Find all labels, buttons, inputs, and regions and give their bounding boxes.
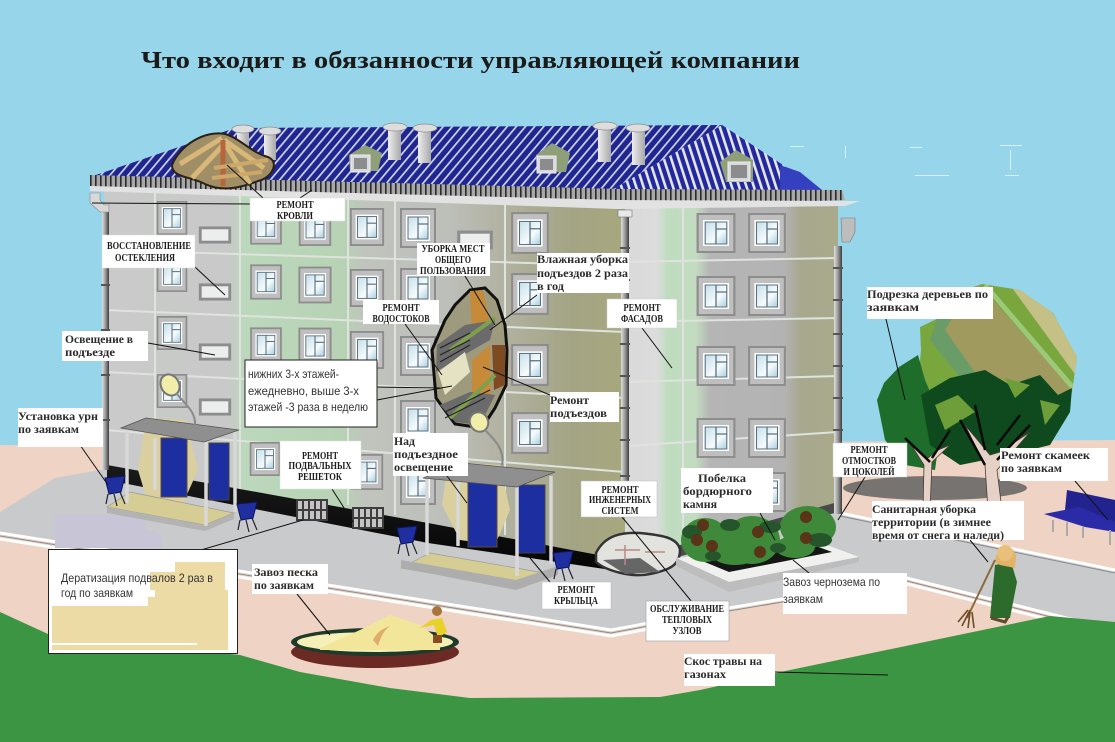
stairwell cutaway bbox=[432, 288, 507, 428]
sky specks bbox=[790, 145, 1022, 176]
label: дератизация: Дератизация подвалов 2 раз в bbox=[61, 571, 213, 585]
label: завоз чернозема bbox=[783, 573, 907, 614]
label: уборка мест общего пользования bbox=[417, 243, 490, 277]
label: восстановление остекления: ОСТЕКЛЕНИЯ bbox=[115, 253, 175, 264]
label: ремонт водостоков: РЕМОНТ bbox=[382, 303, 420, 314]
roof blue corner bbox=[780, 165, 822, 190]
park bench bbox=[1044, 490, 1115, 545]
label: ремонт инженерных систем: РЕМОНТ bbox=[602, 485, 638, 496]
label: ремонт отмостков и цоколей bbox=[833, 443, 907, 478]
roof hip bbox=[612, 125, 820, 190]
label: подрезка деревьев: Подрезка деревьев по bbox=[867, 287, 988, 301]
label: побелка бордюрного камня bbox=[681, 468, 773, 513]
label: уборка подъездов bbox=[245, 360, 377, 427]
trees bbox=[877, 284, 1077, 501]
label: ремонт кровли bbox=[250, 198, 345, 222]
label: ремонт отмостков и цоколей: ОТМОСТКОВ bbox=[842, 456, 896, 467]
lawn bbox=[0, 612, 1115, 742]
label: санитарная уборка: территории (в зимнее bbox=[872, 515, 992, 529]
label: уборка мест общего пользования: ПОЛЬЗОВАНИЯ bbox=[420, 266, 486, 277]
building bbox=[104, 190, 838, 572]
label: обслуживание тепловых узлов: УЗЛОВ bbox=[672, 626, 702, 637]
label: ремонт подъездов bbox=[550, 392, 619, 422]
label: обслуживание тепловых узлов: ТЕПЛОВЫХ bbox=[662, 615, 712, 626]
label: ремонт фасадов bbox=[607, 299, 677, 328]
label: ремонт подъездов: Ремонт bbox=[550, 393, 589, 407]
label: установка урн bbox=[18, 408, 103, 447]
ground bbox=[0, 440, 1115, 742]
benches at entrances bbox=[105, 476, 573, 581]
label: дератизация bbox=[48, 550, 238, 654]
label: влажная уборка: Влажная уборка bbox=[537, 252, 628, 266]
leader lines bbox=[80, 165, 1108, 675]
label: обслуживание тепловых узлов bbox=[646, 601, 729, 641]
title: Что входит в обязанности управляющей компании bbox=[141, 48, 800, 74]
label: ремонт скамеек: Ремонт скамеек bbox=[1001, 448, 1090, 462]
label: влажная уборка: в год bbox=[537, 279, 564, 293]
label: санитарная уборка bbox=[872, 501, 1024, 542]
eave board bbox=[90, 186, 860, 209]
tree crown left bbox=[877, 355, 942, 470]
label: дератизация: год по заявкам bbox=[61, 586, 133, 600]
child figure bbox=[420, 606, 447, 643]
windows, left facade bbox=[157, 201, 549, 505]
label: завоз песка bbox=[252, 564, 328, 594]
label: ремонт кровли: РЕМОНТ bbox=[276, 200, 314, 211]
lamp left bbox=[157, 371, 195, 425]
label: ремонт водостоков: ВОДОСТОКОВ bbox=[372, 314, 430, 325]
label: ремонт крыльца: РЕМОНТ bbox=[558, 585, 594, 596]
label: ремонт инженерных систем: СИСТЕМ bbox=[602, 506, 639, 517]
label: ремонт крыльца bbox=[542, 582, 611, 609]
label: скос травы: Скос травы на bbox=[684, 654, 762, 668]
label: завоз песка: Завоз песка bbox=[254, 565, 318, 579]
label: скос травы: газонах bbox=[684, 667, 726, 681]
label: ремонт подвальных решеток: ПОДВАЛЬНЫХ bbox=[288, 461, 352, 472]
street sweeper bbox=[958, 545, 1017, 628]
label: ремонт крыльца: КРЫЛЬЦА bbox=[554, 596, 598, 607]
sandbox bbox=[291, 615, 459, 668]
label: над подъездное освещение: Над bbox=[394, 434, 415, 448]
label: завоз чернозема: заявкам bbox=[783, 592, 823, 606]
basement grates bbox=[296, 499, 384, 529]
label: подрезка деревьев bbox=[867, 287, 993, 319]
label: ремонт подъездов: подъездов bbox=[550, 406, 608, 420]
porch 2 bbox=[401, 462, 558, 590]
label: восстановление остекления: ВОССТАНОВЛЕНИЕ bbox=[107, 241, 191, 252]
tree trunks bbox=[908, 440, 950, 510]
label: ремонт отмостков и цоколей: РЕМОНТ bbox=[850, 445, 888, 456]
label: уборка мест общего пользования: ОБЩЕГО bbox=[435, 255, 471, 266]
label: ремонт скамеек bbox=[1000, 448, 1108, 481]
label: влажная уборка: подъездов 2 раза bbox=[537, 266, 628, 280]
label: побелка бордюрного камня: Побелка bbox=[698, 471, 746, 485]
flowerbed bbox=[676, 506, 859, 592]
label: обслуживание тепловых узлов: ОБСЛУЖИВАНИЕ bbox=[650, 604, 724, 615]
curbs bbox=[0, 513, 1115, 636]
purple smudge bbox=[55, 515, 162, 548]
dormers bbox=[349, 143, 753, 182]
plinth right bbox=[625, 502, 838, 572]
label: влажная уборка bbox=[537, 252, 629, 293]
label: освещение в подъезде: Освещение в bbox=[65, 332, 133, 346]
right facade bbox=[625, 204, 838, 572]
label: ремонт скамеек: по заявкам bbox=[1001, 461, 1062, 475]
label: над подъездное освещение: подъездное bbox=[394, 447, 459, 461]
label: ремонт подвальных решеток: РЕШЕТОК bbox=[298, 472, 342, 483]
label: ремонт отмостков и цоколей: И ЦОКОЛЕЙ bbox=[844, 466, 894, 478]
label: подрезка деревьев: заявкам bbox=[867, 300, 919, 314]
label: ремонт водостоков bbox=[363, 300, 439, 325]
utility cutaway bbox=[596, 533, 680, 575]
label: завоз песка: по заявкам bbox=[254, 578, 314, 592]
left facade bbox=[104, 190, 625, 572]
roof bbox=[90, 125, 860, 209]
label: побелка бордюрного камня: бордюрного bbox=[683, 484, 752, 498]
lamp right bbox=[466, 409, 503, 465]
roof cutaway with rafters bbox=[172, 133, 274, 188]
label: освещение в подъезде bbox=[62, 331, 148, 361]
downpipes bbox=[90, 193, 855, 514]
roof vents bbox=[232, 122, 650, 165]
eave strip bbox=[90, 175, 845, 208]
label: восстановление остекления bbox=[102, 235, 195, 268]
label: санитарная уборка: время от снега и наледи) bbox=[872, 528, 1004, 542]
label: уборка подъездов: этажей -3 раза в неделю bbox=[248, 400, 368, 414]
label: установка урн: Установка урн bbox=[18, 409, 98, 423]
label: ремонт фасадов: РЕМОНТ bbox=[624, 303, 660, 314]
background sky bbox=[0, 0, 1115, 460]
label: уборка подъездов: ежедневно, выше 3-х bbox=[248, 384, 359, 398]
label: освещение в подъезде: подъезде bbox=[65, 345, 116, 359]
label: над подъездное освещение: освещение bbox=[394, 460, 454, 474]
label: над подъездное освещение bbox=[393, 433, 468, 476]
label: установка урн: по заявкам bbox=[18, 422, 79, 436]
facade panel lines bbox=[105, 192, 838, 550]
label: ремонт подвальных решеток bbox=[280, 441, 361, 489]
label: ремонт подвальных решеток: РЕМОНТ bbox=[302, 451, 338, 462]
curb shading bbox=[0, 516, 1115, 633]
label: ремонт фасадов: ФАСАДОВ bbox=[621, 314, 663, 325]
label: уборка мест общего пользования: УБОРКА МЕСТ bbox=[422, 244, 484, 255]
tree crown back bbox=[920, 284, 1077, 395]
pavement bbox=[0, 470, 1115, 632]
tree shadow bbox=[843, 476, 1027, 500]
roof front slope bbox=[90, 125, 722, 190]
label: скос травы bbox=[684, 654, 775, 686]
label: уборка подъездов: нижних 3-х этажей- bbox=[248, 367, 339, 381]
label: ремонт кровли: КРОВЛИ bbox=[277, 211, 313, 222]
label: завоз чернозема: Завоз чернозема по bbox=[783, 575, 880, 589]
windows, right facade bbox=[697, 213, 786, 512]
porch 1 bbox=[107, 418, 239, 531]
label: побелка бордюрного камня: камня bbox=[683, 497, 718, 511]
plinth left bbox=[107, 465, 625, 572]
label: санитарная уборка: Санитарная уборка bbox=[872, 502, 976, 516]
label: ремонт инженерных систем bbox=[581, 481, 657, 517]
tree dark foliage bbox=[921, 370, 1072, 465]
label: ремонт инженерных систем: ИНЖЕНЕРНЫХ bbox=[589, 495, 651, 506]
